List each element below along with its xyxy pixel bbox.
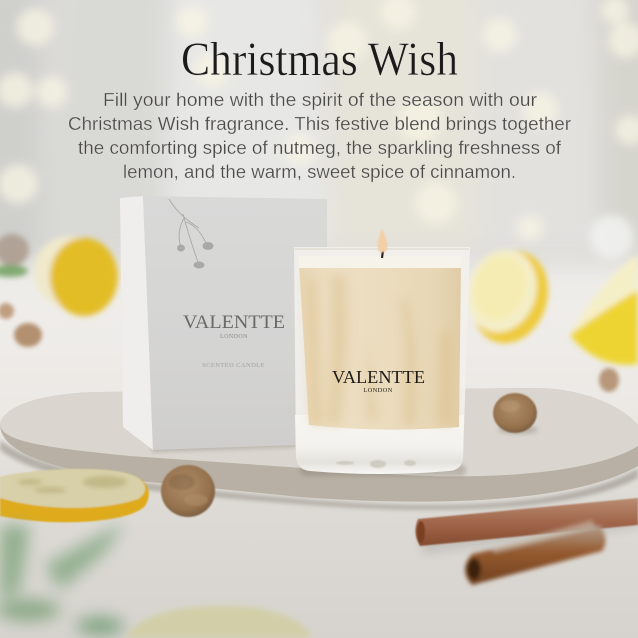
description text: lemon, and the warm, sweet spice of cinnamon. [123, 161, 516, 182]
stick one [415, 498, 638, 546]
candle location: LONDON [363, 387, 393, 394]
lemon, back left [34, 236, 118, 316]
blurred pine, front left [0, 522, 125, 635]
description text [68, 89, 571, 182]
blurred wall background [0, 0, 638, 252]
lemon half, far right [570, 255, 638, 365]
wax [299, 264, 461, 430]
sprig illustration [169, 199, 213, 268]
pine branch, back left [0, 234, 29, 277]
box location: LONDON [220, 334, 248, 340]
rim highlight [295, 248, 469, 250]
walnut on tray [493, 393, 538, 434]
stick two [465, 520, 606, 585]
lemon half, back right [457, 241, 560, 353]
box side [120, 196, 153, 450]
tray [0, 388, 638, 510]
dried orange slice [0, 469, 149, 522]
candle brand name: VALENTTE [332, 367, 425, 387]
description text: Christmas Wish fragrance. This festive blend brings together [68, 113, 571, 134]
description text: Fill your home with the spirit of the season with our [103, 89, 537, 110]
wax marbling [306, 275, 452, 425]
flame [378, 229, 387, 252]
small nutmeg, back right [599, 368, 619, 392]
candle box [120, 196, 327, 452]
blurred lemon slice, bottom [125, 606, 312, 638]
wick [382, 250, 383, 258]
bokeh lights [0, 0, 638, 259]
small nutmegs, back left [0, 303, 42, 347]
box front [143, 196, 327, 450]
cinnamon sticks [415, 498, 638, 585]
title: Christmas Wish [181, 33, 458, 86]
glass [294, 247, 470, 472]
glass sparkle [336, 460, 416, 468]
table surface [0, 261, 638, 444]
description text: the comforting spice of nutmeg, the sparkling freshness of [78, 137, 562, 158]
box brand name: VALENTTE [183, 312, 285, 333]
box product label: SCENTED CANDLE [202, 362, 265, 369]
glass base [295, 415, 464, 474]
candle [294, 229, 470, 476]
nutmeg, front [161, 465, 215, 517]
